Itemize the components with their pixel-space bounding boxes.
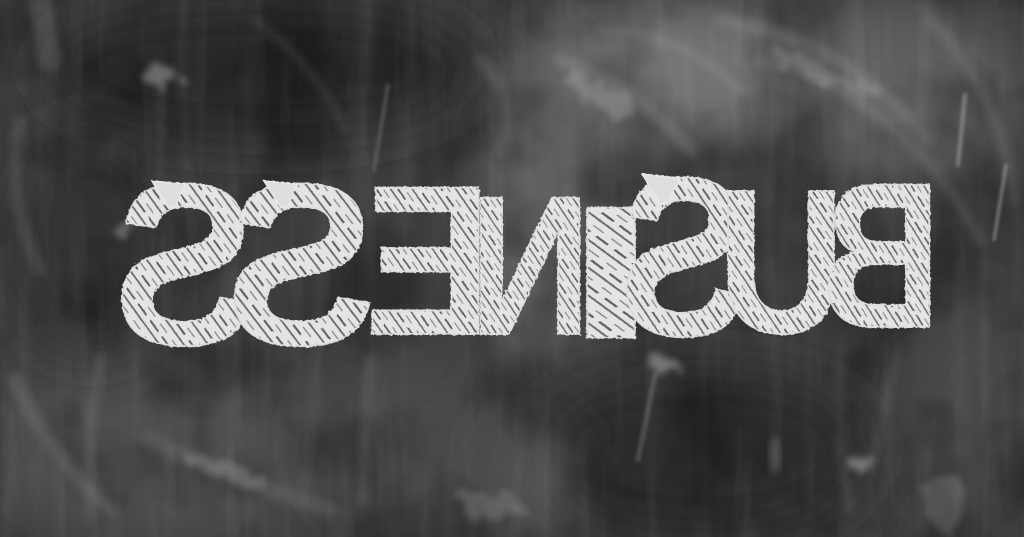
letter B: B [821, 140, 941, 371]
letter E: E [365, 141, 491, 379]
letter S (outer left): S [114, 135, 256, 393]
mirrored chalk word: BUSINESS [114, 131, 941, 394]
letter U: U [717, 147, 845, 376]
letter I: I [565, 167, 657, 379]
letter S (second): S [226, 137, 376, 394]
letter S (third): S [620, 131, 748, 383]
letter N: N [469, 155, 591, 376]
chalk smudges [118, 48, 965, 530]
chalk flourishes on S tops [152, 174, 680, 208]
thin chalk scratches [374, 85, 1006, 460]
